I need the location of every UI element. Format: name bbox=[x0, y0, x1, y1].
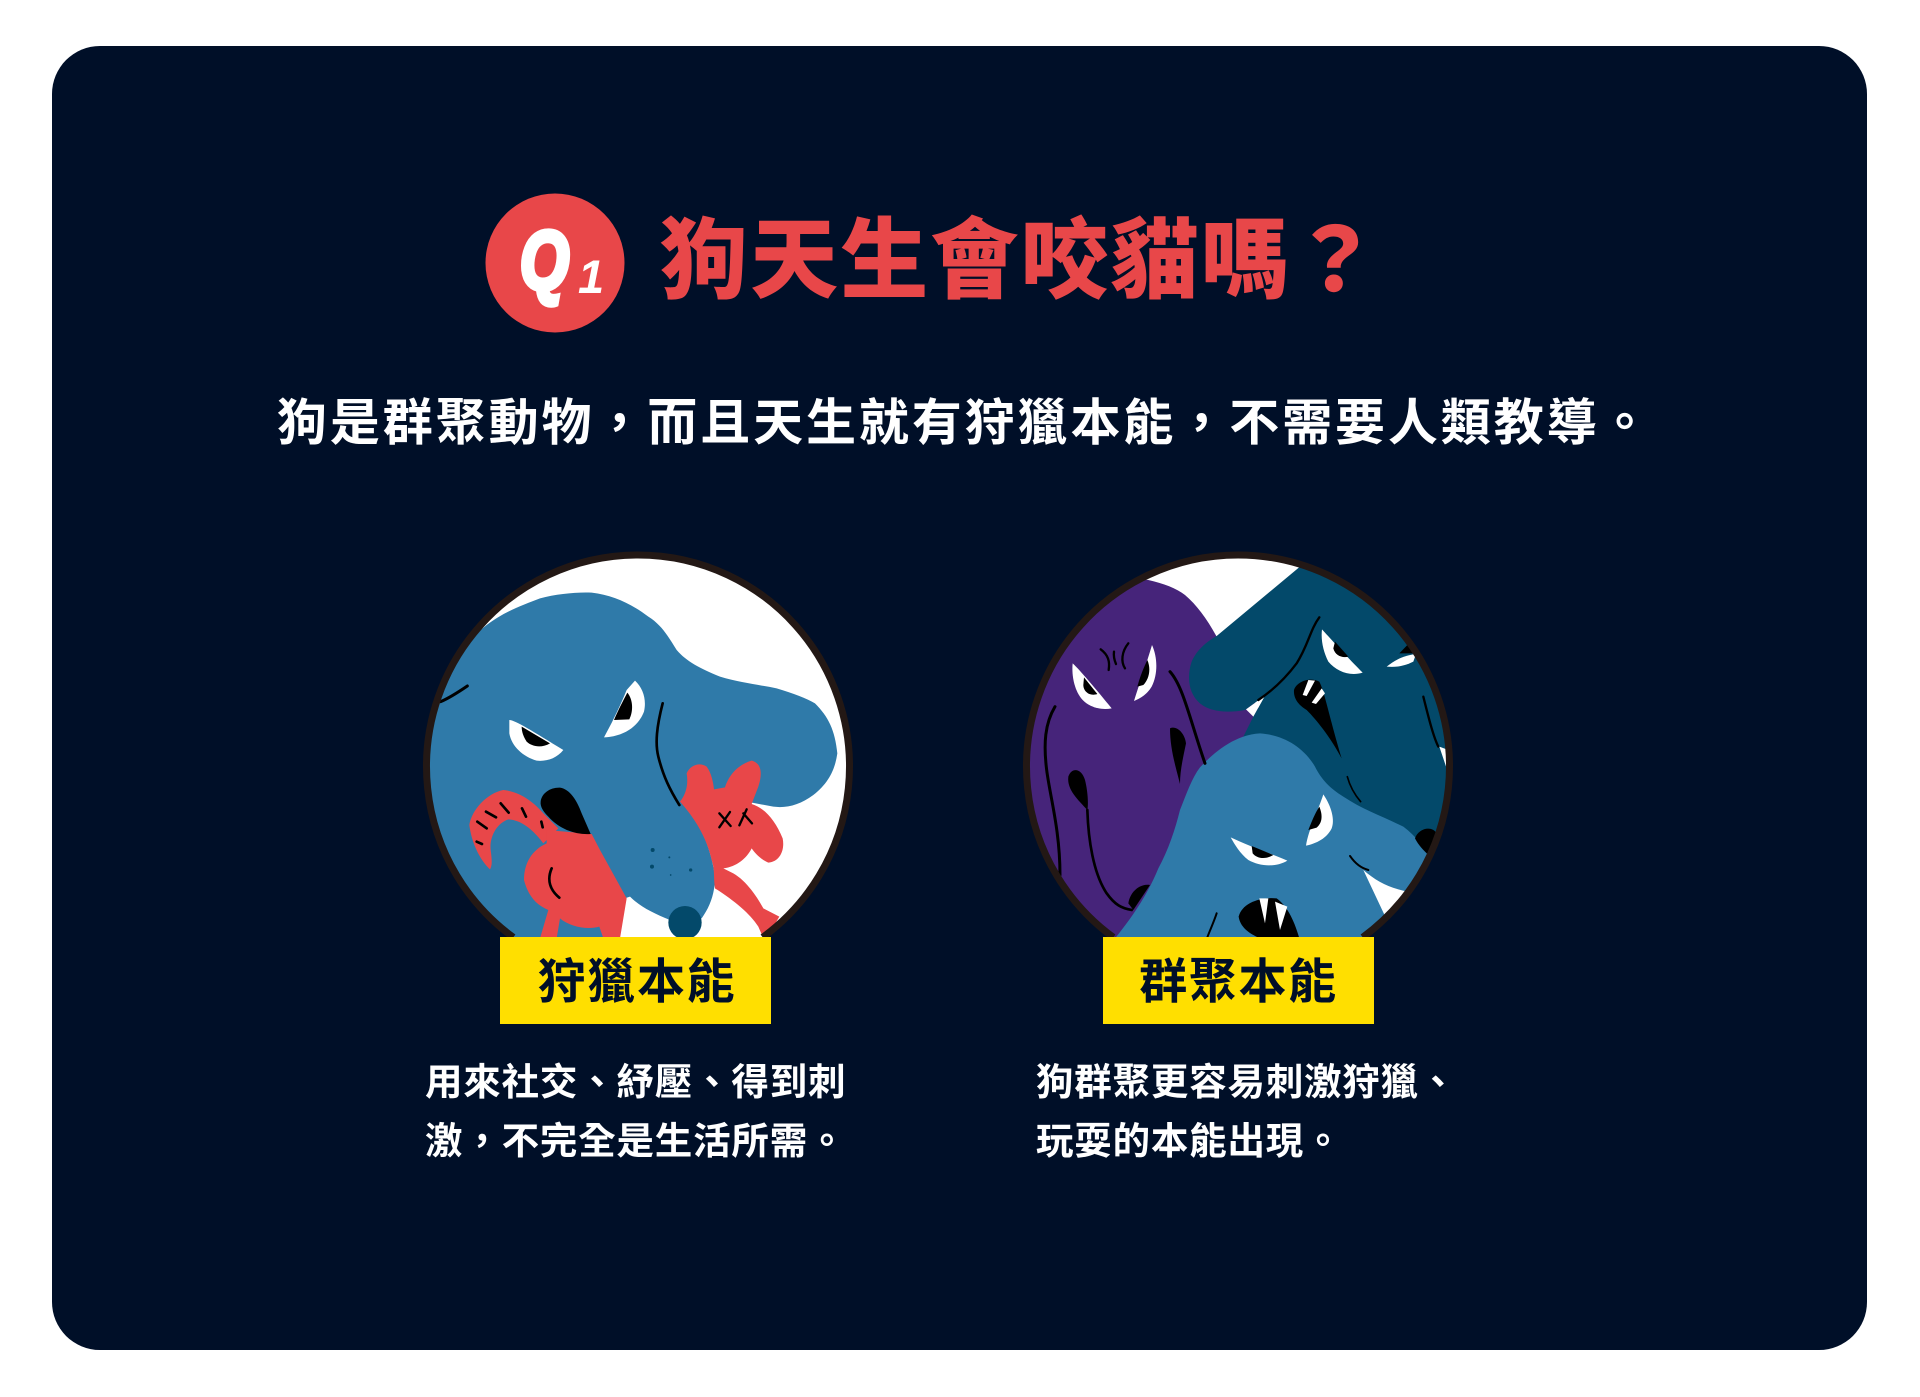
label: group instinct bbox=[1103, 937, 1374, 1024]
eye right bbox=[604, 681, 645, 737]
dog body blue bbox=[400, 593, 837, 938]
illustration: dog hunting rabbit in circle bbox=[423, 552, 853, 937]
label: hunting instinct bbox=[500, 937, 771, 1024]
icon: Q1 badge: Q bbox=[520, 214, 569, 307]
eye left bbox=[509, 720, 563, 761]
icon: Q1 badge bbox=[486, 194, 624, 332]
label: hunting instinct: 狩獵本能 bbox=[538, 956, 736, 1009]
mouth black bbox=[541, 788, 591, 834]
nose tip teal bbox=[668, 906, 702, 939]
purple dog face bbox=[1072, 663, 1112, 709]
text block: group instinct description bbox=[1036, 1061, 1457, 1162]
white gap bbox=[1363, 747, 1448, 916]
text block: hunting instinct description: 激，不完全是生活所需。 bbox=[425, 1120, 846, 1162]
rabbit body red bbox=[524, 830, 627, 938]
subtitle text: 狗是群聚動物，而且天生就有狩獵本能，不需要人類教導。 bbox=[277, 395, 1652, 451]
freckles bbox=[650, 848, 692, 876]
text block: group instinct description: 狗群聚更容易刺激狩獵、 bbox=[1036, 1061, 1457, 1103]
text block: hunting instinct description bbox=[425, 1061, 846, 1162]
dog line marks bbox=[441, 686, 752, 898]
purple dog bbox=[1030, 580, 1258, 937]
blue dog bbox=[1115, 733, 1433, 938]
blue dog face bbox=[1231, 837, 1287, 865]
illustration: group of three dogs in circle bbox=[1023, 552, 1453, 937]
ring bbox=[426, 555, 849, 937]
black nose lower right bbox=[1415, 828, 1436, 854]
rabbit head and legs red bbox=[680, 761, 783, 938]
ring bbox=[1026, 555, 1449, 937]
teal dog face bbox=[1322, 629, 1363, 674]
title: 狗天生會咬貓嗎？ bbox=[660, 211, 1381, 310]
text block: hunting instinct description: 用來社交、紓壓、得到刺 bbox=[425, 1061, 846, 1103]
icon: Q1 badge: 1 bbox=[578, 250, 604, 303]
label: group instinct: 群聚本能 bbox=[1139, 956, 1338, 1009]
teal dog bbox=[1189, 568, 1446, 838]
rabbit tail red bbox=[469, 790, 558, 869]
text block: group instinct description: 玩耍的本能出現。 bbox=[1036, 1120, 1342, 1162]
